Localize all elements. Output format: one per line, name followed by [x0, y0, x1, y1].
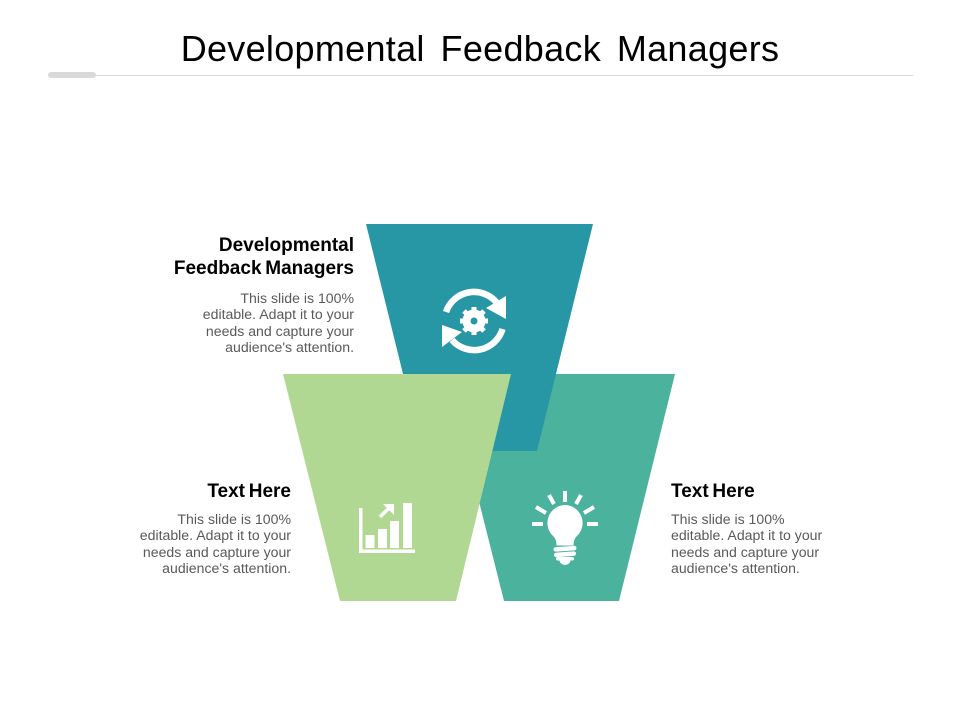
heading: developmental feedback managers: Developmental: [219, 235, 354, 256]
text block: developmental feedback managers: [174, 235, 354, 355]
heading: text here left: Text Here: [207, 481, 291, 502]
title: Developmental Feedback Managers: [181, 28, 779, 69]
body text right: This slide is 100%: [671, 510, 785, 526]
heading: text here right: Text Here: [671, 481, 755, 502]
body text: needs and capture your: [206, 322, 354, 338]
body text right: editable. Adapt it to your: [671, 527, 822, 543]
icon: light bulb: [532, 491, 598, 565]
icon: bar chart with arrow: [359, 503, 415, 553]
heading: developmental feedback managers: [174, 235, 354, 279]
body text: editable. Adapt it to your: [203, 306, 354, 322]
left trapezoid: [283, 374, 511, 601]
body text left: audience's attention.: [162, 560, 291, 576]
body text left: editable. Adapt it to your: [140, 527, 291, 543]
icon: gear with refresh arrows: [442, 292, 506, 350]
body text right: [671, 510, 822, 576]
body text left: This slide is 100%: [177, 510, 291, 526]
body text: [203, 290, 354, 355]
text block: left: [140, 481, 291, 576]
top trapezoid: [366, 224, 593, 451]
body text left: needs and capture your: [143, 544, 291, 560]
text block: right: [671, 481, 822, 576]
body text right: audience's attention.: [671, 560, 800, 576]
body text: This slide is 100%: [240, 290, 354, 306]
body text right: needs and capture your: [671, 544, 819, 560]
body text: audience's attention.: [225, 339, 354, 355]
body text left: [140, 510, 291, 576]
heading: developmental feedback managers: Feedback Managers: [174, 258, 354, 279]
right trapezoid: [447, 374, 675, 601]
